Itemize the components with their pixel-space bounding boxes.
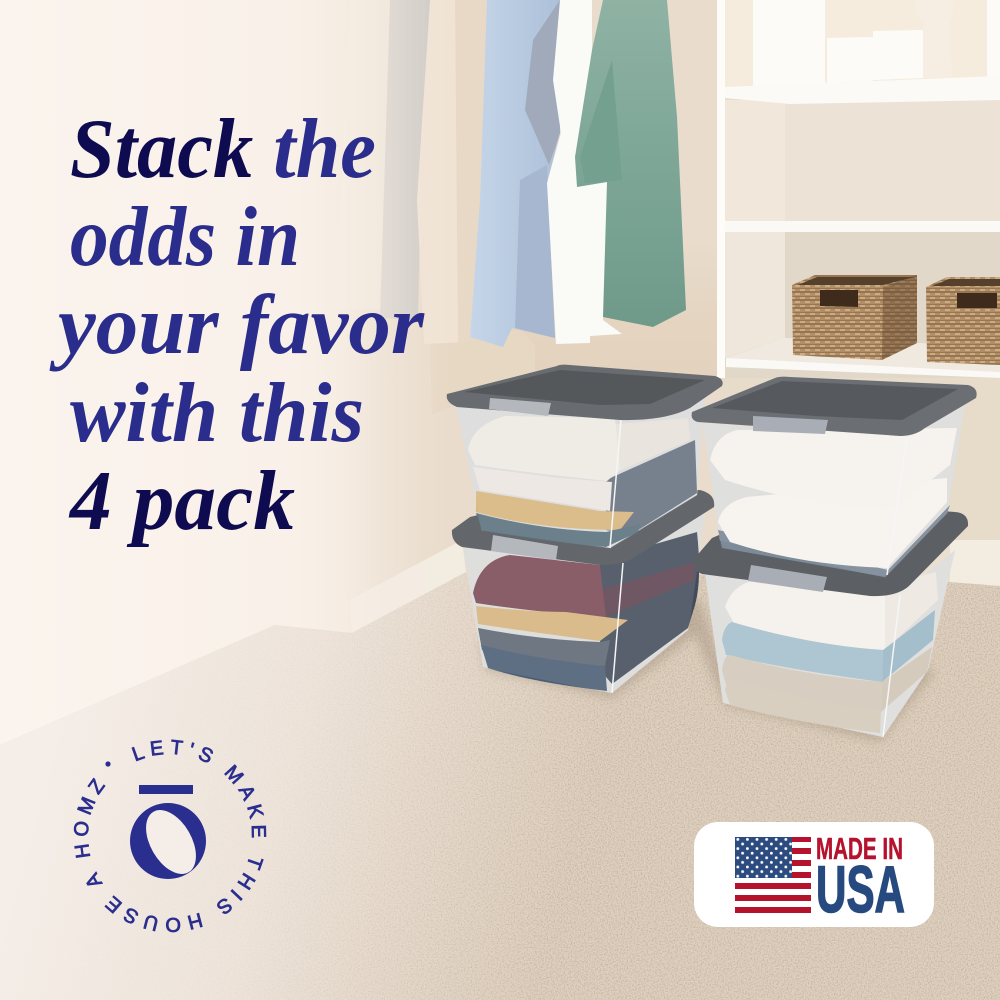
brand seal xyxy=(74,739,266,932)
line 4: with this xyxy=(70,366,364,460)
latch xyxy=(748,565,827,592)
storage bin: top left xyxy=(447,365,723,548)
line 3: your favor xyxy=(49,278,425,372)
made in text: MADE IN xyxy=(816,831,903,866)
hanging clothes xyxy=(335,0,686,415)
shelf boards xyxy=(725,76,1000,104)
closet back wall xyxy=(340,0,740,600)
lower compartment back xyxy=(725,232,1000,378)
lid xyxy=(447,365,723,420)
contents xyxy=(710,428,957,577)
white boxes on top shelf xyxy=(753,0,923,86)
beige coat lower hem xyxy=(430,330,535,415)
contents xyxy=(722,572,938,733)
made in usa badge xyxy=(694,822,934,927)
cream jacket xyxy=(335,0,395,310)
headline xyxy=(49,102,425,548)
slogan separator dot xyxy=(105,761,111,767)
contents xyxy=(468,416,697,547)
clear body base xyxy=(456,395,705,548)
lid xyxy=(693,500,968,596)
left fade overlay xyxy=(0,0,700,1000)
latch xyxy=(753,416,828,434)
baseboard xyxy=(350,540,1000,633)
right wall below shelves xyxy=(720,375,1000,545)
clear body film xyxy=(456,395,705,548)
middle compartment back xyxy=(725,100,1000,222)
clear body film xyxy=(463,510,705,693)
logo bar xyxy=(139,785,193,794)
latch xyxy=(491,535,558,560)
contents xyxy=(473,532,699,691)
clear body film xyxy=(705,550,955,737)
lid xyxy=(692,377,977,436)
shelving unit xyxy=(717,0,1000,378)
top compartment back xyxy=(725,0,1000,90)
clear body base xyxy=(705,550,955,737)
line 2: odds in xyxy=(70,190,300,284)
shelf side panels xyxy=(725,100,785,222)
line 5: 4 pack xyxy=(68,454,295,548)
clear body base xyxy=(463,510,705,693)
carpet floor xyxy=(152,572,1000,1000)
grey garment xyxy=(380,0,432,320)
blue shirt xyxy=(470,0,560,347)
floor shadows xyxy=(480,600,935,742)
logo ring xyxy=(130,801,206,883)
beige coat sleeve xyxy=(417,0,490,344)
lid inner panel xyxy=(712,381,958,420)
storage bin: top right xyxy=(692,377,977,577)
lid inner panel xyxy=(464,370,705,405)
latch xyxy=(489,398,551,416)
storage bin: bottom right xyxy=(693,500,968,737)
green shirt xyxy=(575,0,686,327)
lid xyxy=(452,490,714,565)
line 1: Stack the xyxy=(70,102,376,196)
storage bin: bottom left xyxy=(452,490,714,693)
clear body film xyxy=(703,405,965,577)
vase xyxy=(915,0,953,78)
usa text: USA xyxy=(816,852,905,926)
white shirt xyxy=(547,0,622,344)
american flag xyxy=(735,837,811,913)
circular slogan: LET'S MAKE THIS HOUSE A HOMZ xyxy=(74,739,266,932)
wicker baskets xyxy=(792,275,1000,365)
clear body base xyxy=(703,405,965,575)
